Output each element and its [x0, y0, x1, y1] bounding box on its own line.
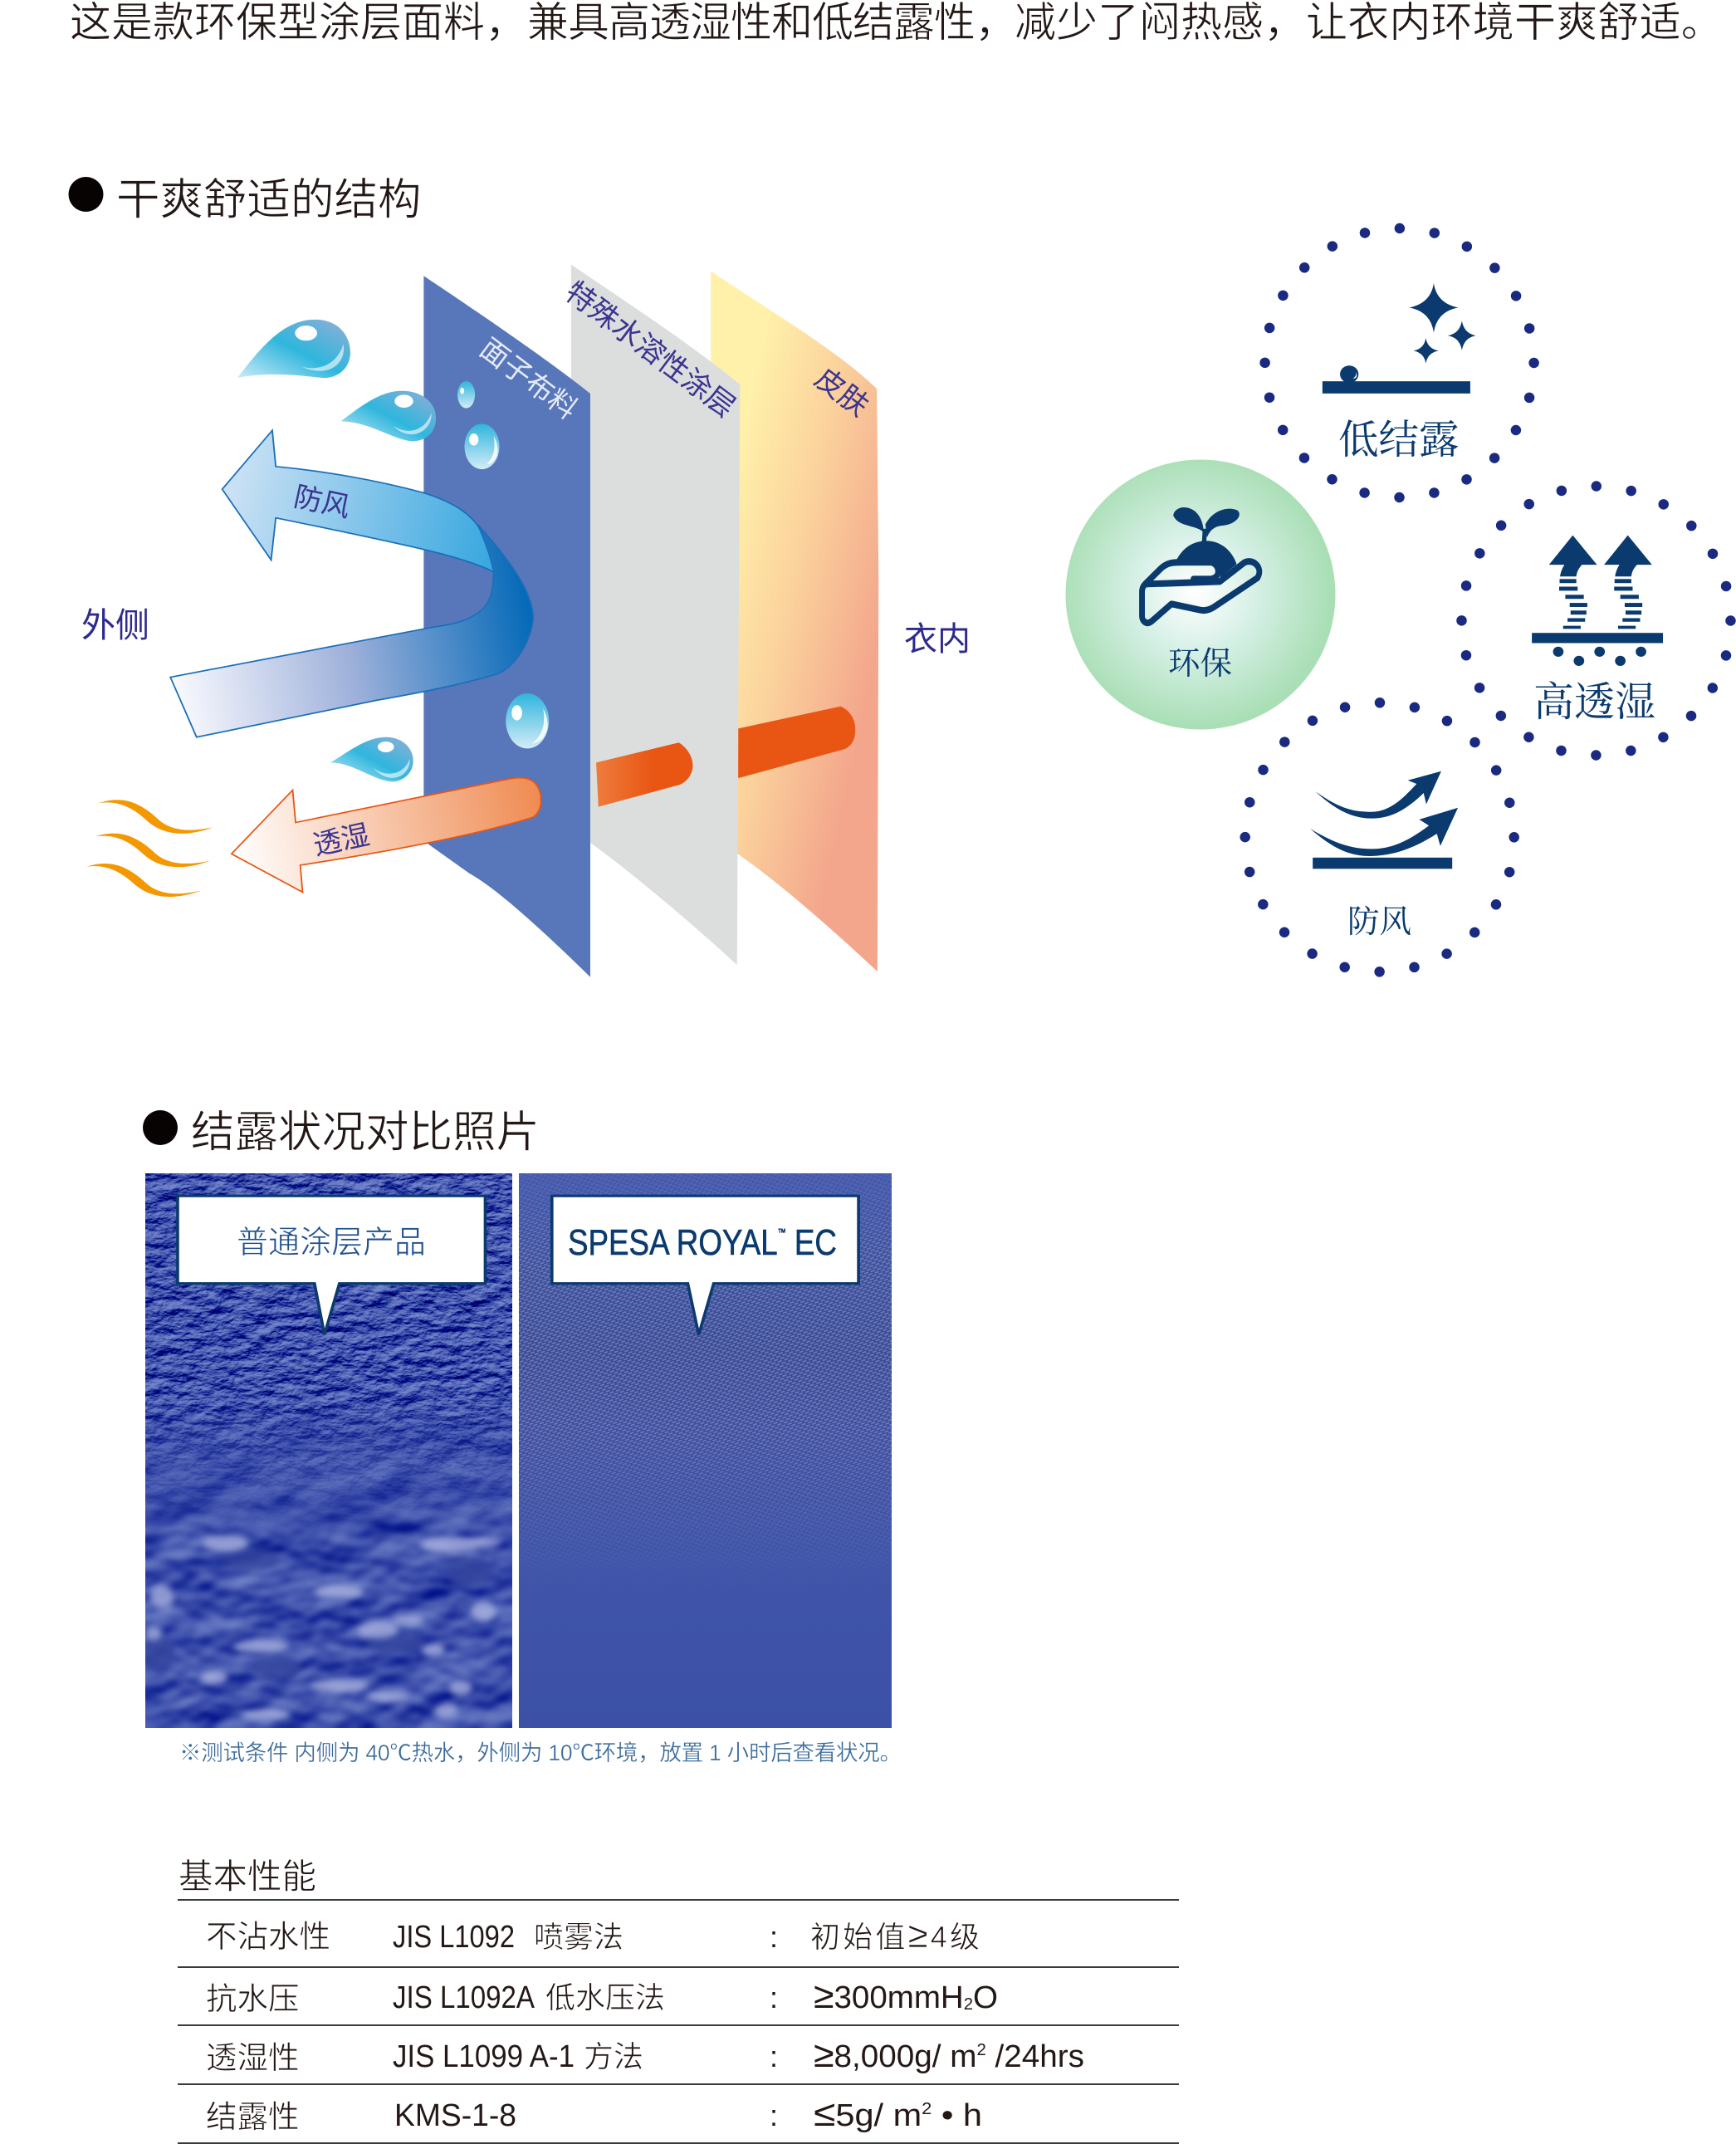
moisture bar on coating — [596, 742, 692, 807]
intro text — [70, 0, 1723, 46]
feature: high moisture permeability circle — [1461, 487, 1730, 756]
row: moisture permeability: /24hrs — [986, 2039, 1084, 2074]
table: basic performance — [178, 1857, 1179, 2143]
icon: water droplets — [237, 320, 549, 781]
row: condensation: : — [770, 2098, 778, 2132]
callout: SPESA ROYAL EC: EC — [786, 1222, 837, 1263]
label: outside: 外侧 — [81, 606, 149, 644]
row: water pressure resistance: 低水压法 — [545, 1980, 665, 2014]
table heading: 基本性能 — [178, 1857, 316, 1896]
row: water pressure resistance — [206, 1975, 998, 2016]
label: moisture permeable: 透湿 — [311, 819, 372, 862]
photo: ordinary coated product — [141, 1173, 512, 1728]
moisture arrow — [232, 778, 541, 892]
label: high permeability: 高透湿 — [1533, 670, 1655, 728]
row: moisture permeability: ≥8,000g/ m — [814, 2034, 975, 2075]
row: moisture permeability: JIS L1099 A-1 — [393, 2039, 575, 2074]
caption: test conditions: ※测试条件 内侧为 40℃热水，外侧为 10℃环境，放置 1 小时后查看状况。 — [179, 1740, 902, 1765]
row: moisture permeability: 2 — [976, 2041, 986, 2059]
row: water pressure resistance: 2 — [964, 1995, 973, 2014]
icon: heat waves — [86, 800, 213, 897]
row: condensation: KMS-1-8 — [394, 2098, 516, 2133]
panel: skin layer — [711, 271, 878, 972]
icon: sparkles over surface — [1323, 283, 1476, 394]
row: moisture permeability: 透湿性 — [206, 2040, 299, 2075]
label: skin: 皮肤 — [809, 362, 874, 423]
label: special water-soluble coating: 特殊水溶性涂层 — [560, 276, 741, 423]
row: water pressure resistance: O — [973, 1980, 998, 2015]
label: eco: 环保 — [1168, 639, 1232, 684]
callout: ordinary coated product: 普通涂层产品 — [237, 1226, 426, 1260]
intro text: 这是款环保型涂层面料， — [70, 0, 526, 46]
row: water repellency: 初始值≥4级 — [810, 1915, 980, 1956]
row: condensation: 2 — [922, 2100, 932, 2118]
panel: face fabric layer — [423, 276, 590, 977]
callout: SPESA ROYAL EC — [552, 1196, 858, 1334]
label: windproof: 防风 — [1347, 897, 1411, 942]
callout: SPESA ROYAL EC: ™ — [778, 1226, 786, 1238]
row: moisture permeability: : — [770, 2039, 778, 2073]
row: water pressure resistance: 抗水压 — [206, 1981, 299, 2016]
row: condensation: • h — [932, 2098, 982, 2133]
icon: rising striped arrows — [1532, 536, 1663, 666]
row: moisture permeability — [206, 2034, 1084, 2075]
feature: low condensation circle — [1265, 228, 1534, 497]
row: water pressure resistance: JIS L1092A — [393, 1980, 535, 2015]
icon: hand holding sprout — [1142, 507, 1259, 623]
row: condensation: ≤5g/ m — [814, 2093, 914, 2134]
callout: ordinary coated product — [178, 1196, 485, 1334]
intro text: 兼具高透湿性和低结露性， — [527, 0, 1015, 46]
row: moisture permeability: 方法 — [584, 2039, 643, 2073]
label: low condensation: 低结露 — [1338, 407, 1460, 465]
row: water repellency: 喷雾法 — [534, 1920, 623, 1954]
wind arrow: deflected upper part — [223, 430, 494, 572]
heading: condensation comparison photos: 结露状况对比照片 — [191, 1108, 540, 1157]
row: water pressure resistance: ≥300mmH — [814, 1975, 962, 2016]
feature: eco-friendly circle — [1066, 460, 1335, 729]
intro text: 减少了闷热感， — [1015, 0, 1305, 46]
intro text: 让衣内环境干爽舒适。 — [1306, 0, 1723, 46]
row: water repellency: JIS L1092 — [393, 1920, 515, 1955]
diagram: layered fabric structure — [81, 265, 971, 977]
label: inside: 衣内 — [904, 621, 971, 658]
feature: windproof circle — [1245, 702, 1514, 972]
label: face fabric: 面子布料 — [474, 333, 583, 426]
icon: wind arrows over surface — [1310, 771, 1458, 869]
row: water repellency: : — [770, 1920, 778, 1954]
heading: dry comfort structure: 干爽舒适的结构 — [116, 175, 422, 224]
row: water repellency — [206, 1915, 980, 1956]
moisture bar on skin — [738, 707, 855, 778]
row: condensation — [206, 2093, 982, 2134]
photo: SPESA ROYAL EC — [519, 1173, 892, 1728]
panel: special coating layer — [571, 265, 740, 965]
label: wind resistance: 防风 — [291, 481, 353, 524]
row: water pressure resistance: : — [770, 1980, 778, 2014]
wind arrow: incoming lower part — [170, 525, 533, 737]
row: condensation: 结露性 — [206, 2099, 299, 2134]
row: water repellency: 不沾水性 — [206, 1919, 330, 1954]
callout: SPESA ROYAL EC: SPESA ROYAL — [568, 1222, 819, 1263]
